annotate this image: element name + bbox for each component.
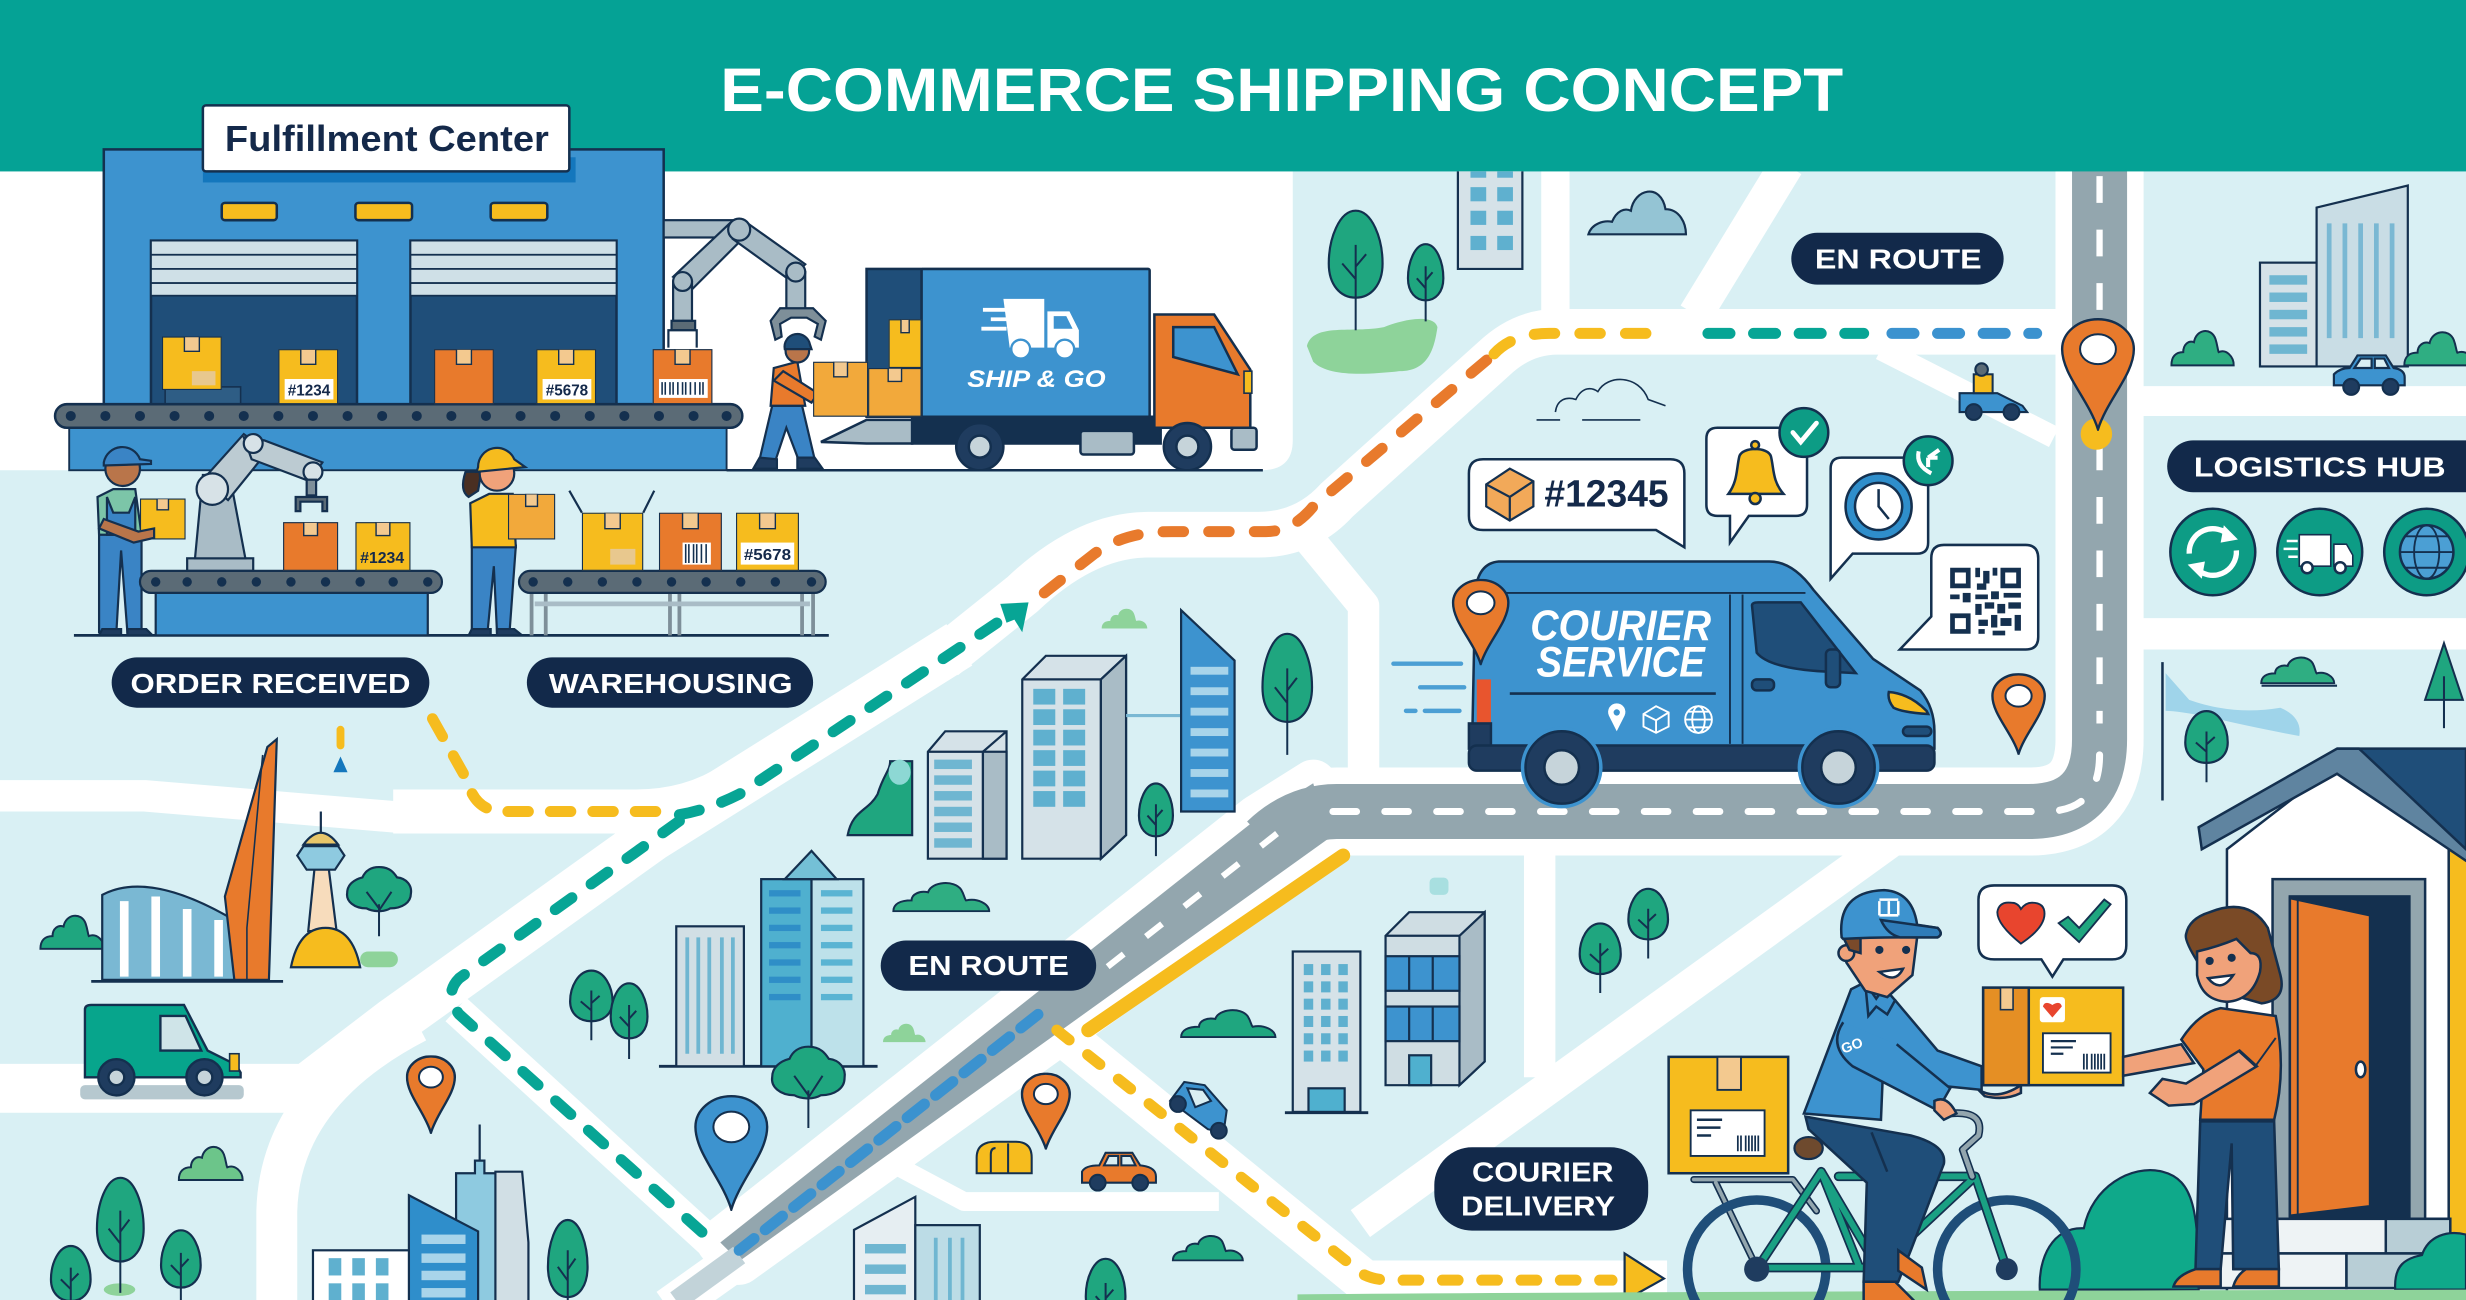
van icons <box>1608 703 1712 733</box>
label: LOGISTICS HUB: LOGISTICS HUB <box>2194 452 2446 483</box>
icon: refresh <box>2170 509 2255 595</box>
lower-left trees <box>51 1147 243 1300</box>
top-middle scenery <box>1307 171 1686 420</box>
sign: Fulfillment Center: Fulfillment Center <box>225 118 549 159</box>
pin: on van <box>1453 580 1508 664</box>
sign: Fulfillment Center <box>203 105 569 171</box>
arrow: teal route head <box>1000 602 1029 632</box>
panel: order received scene <box>74 434 829 635</box>
flag and scenery <box>2162 643 2463 801</box>
arrow: yellow route head <box>1625 1253 1664 1300</box>
tree: lower <box>548 1220 588 1300</box>
label: EN ROUTE lower: EN ROUTE <box>908 950 1069 981</box>
robot arm: top <box>664 219 826 348</box>
label: COURIER DELIVERY: COURIER <box>1472 1157 1614 1188</box>
bicycle <box>1688 1113 2076 1300</box>
pin: small orange <box>1992 674 2045 754</box>
label: EN ROUTE top: EN ROUTE <box>1815 243 1982 274</box>
conveyor with boxes: #5678 <box>546 383 588 400</box>
pin: main orange with yellow dot <box>2062 319 2134 450</box>
right side city <box>2171 186 2466 395</box>
bubble: parcel tracking #12345: #12345 <box>1544 472 1669 514</box>
icon: blue drop marker <box>333 756 348 772</box>
label: WAREHOUSING: WAREHOUSING <box>549 668 793 699</box>
courier rider <box>1804 890 2021 1300</box>
label: WAREHOUSING <box>527 657 813 708</box>
bush and tree <box>1086 1236 1243 1300</box>
tree: round <box>772 1047 845 1128</box>
label: EN ROUTE top <box>1791 233 2004 285</box>
van text: COURIER <box>1530 602 1711 649</box>
conveyor 2 <box>156 591 428 635</box>
van: courier service <box>1469 561 1934 808</box>
label: EN ROUTE lower <box>881 940 1096 991</box>
van: green <box>80 1005 244 1099</box>
icon: truck logo <box>981 299 1079 359</box>
bushes: by house <box>2040 1170 2466 1290</box>
trees: center-left <box>570 971 647 1059</box>
trees: center <box>1139 634 1312 856</box>
pin: blue <box>695 1096 767 1209</box>
label: COURIER DELIVERY <box>1434 1147 1648 1231</box>
speed lines <box>1393 664 1464 711</box>
panel: order received scene: #1234 <box>360 550 404 567</box>
pin: orange center <box>1022 1074 1070 1149</box>
buildings: center <box>659 851 878 1066</box>
pin: orange left <box>407 1056 455 1133</box>
bubble: bell notification <box>1706 408 1828 543</box>
icon: globe <box>2384 509 2466 595</box>
label: COURIER DELIVERY: DELIVERY <box>1461 1191 1615 1222</box>
title: E-COMMERCE SHIPPING CONCEPT <box>720 55 1843 124</box>
conveyor 3 <box>532 593 813 635</box>
car: orange <box>1082 1153 1156 1191</box>
delivered box <box>1983 988 2123 1085</box>
route: dashed delivery path <box>340 333 2037 1280</box>
bubble: QR code <box>1900 545 2038 650</box>
worker 1 <box>99 533 142 632</box>
label: LOGISTICS HUB <box>2167 440 2466 492</box>
shed <box>977 1142 1032 1173</box>
van text <box>1530 602 1711 685</box>
trees: lower right <box>1580 889 1668 993</box>
ground strip <box>1297 1290 2466 1300</box>
trees: top <box>1329 211 1443 330</box>
truck: SHIP & GO <box>821 269 1257 470</box>
ground line <box>727 469 1263 471</box>
main gray road <box>676 165 2100 1300</box>
courier uniform logo: GO <box>1839 1034 1865 1057</box>
truck label: SHIP & GO <box>967 366 1106 392</box>
buildings: lower center <box>854 1197 980 1300</box>
house <box>2155 749 2466 1300</box>
tree: near flag <box>2185 711 2228 782</box>
label: ORDER RECEIVED <box>112 657 429 708</box>
conveyor with boxes <box>55 337 742 470</box>
worker: loading truck <box>753 334 868 469</box>
car: blue angled <box>1170 1082 1227 1139</box>
customer <box>2123 907 2282 1286</box>
icon: delivery truck <box>2277 509 2362 595</box>
label: ORDER RECEIVED: ORDER RECEIVED <box>131 668 410 699</box>
buildings: tall cluster <box>848 610 1235 859</box>
worker 2 <box>472 546 516 632</box>
header band <box>0 0 2466 171</box>
bubble: clock <box>1831 436 1953 579</box>
panel: fulfillment center <box>104 149 664 409</box>
seat <box>1794 1137 1823 1159</box>
buildings: lower right <box>1181 878 1485 1113</box>
box on rack <box>1669 1057 1788 1173</box>
bubble: parcel tracking #12345 <box>1469 459 1684 547</box>
bubble: heart and check <box>1978 885 2126 977</box>
bushes: center <box>883 609 1147 1042</box>
panel: order received scene: #5678 <box>744 547 791 564</box>
landmark cluster <box>40 739 411 981</box>
city block: lower <box>313 1124 528 1300</box>
robot 2 <box>187 558 253 571</box>
conveyor with boxes: #1234 <box>288 383 331 400</box>
small delivery vehicle <box>1960 363 2027 420</box>
van text: SERVICE <box>1537 638 1706 685</box>
